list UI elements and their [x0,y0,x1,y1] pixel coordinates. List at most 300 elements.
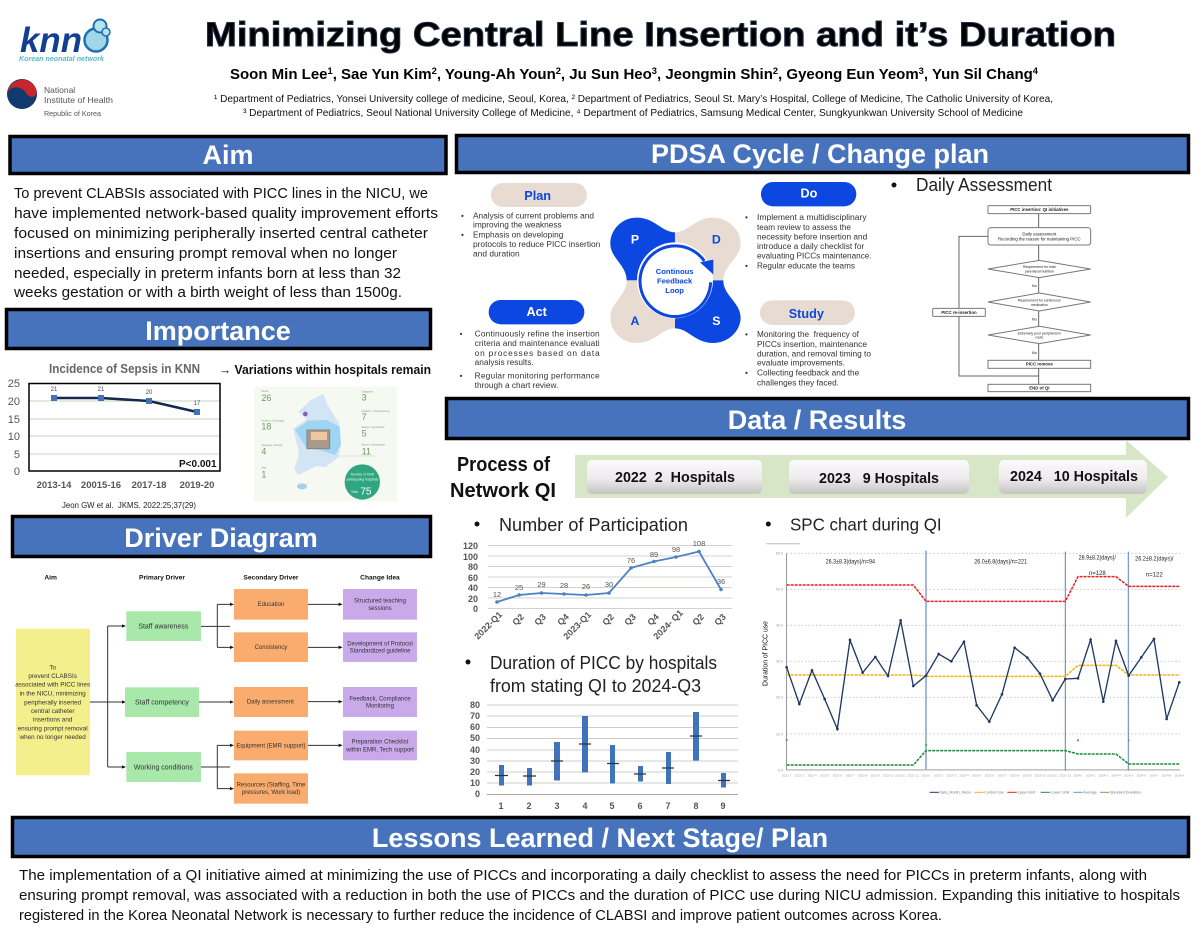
timeline arrow: 2023 9 Hospitals [819,470,939,487]
aim box: peripherally inserted [24,699,82,706]
chart legend [930,791,1141,795]
line chart: incidence of sepsis: Incidence of Sepsis in KNN [49,362,200,376]
logo: National Institute of Health: Institute of Health [44,95,113,105]
line chart: incidence of sepsis: 2019-20 [180,480,214,491]
SPC chart: 2024-2 [1086,774,1096,778]
authors: Soon Min Lee [230,67,324,83]
range chart: duration of PICC by hospitals: 70 [470,711,480,721]
flowchart: daily assessment: PICC remove [1026,362,1053,367]
flowchart: daily assessment: Extremely poor peripheral iv [1018,331,1061,335]
driver diagram chart: Daily assessment [247,699,294,705]
aim box [15,629,90,775]
logo: National Institute of Health [7,79,113,118]
SPC chart: n=128 [1089,571,1106,577]
authors: 1 [328,66,333,76]
line chart: number of participation: 0 [473,604,478,614]
range chart: duration of PICC by hospitals: 2 [526,801,532,811]
line chart: number of participation: 28 [560,581,568,590]
authors: 4 [1033,66,1038,76]
panel: driver diagram [12,516,430,804]
driver diagram chart: Education [258,602,284,608]
line chart: incidence of sepsis [8,362,220,510]
range chart: duration of PICC by hospitals [466,653,738,811]
authors: , Jeongmin Shin [657,67,773,83]
act: • [460,328,463,338]
SPC chart: 2023-1 [921,774,931,778]
do [745,182,872,270]
lessons text: ensuring prompt removal, was associated with a reduction in both the use of PICCs and the duration of PICC use during NICU admission. Expanding this initiative to hospitals [19,887,1180,904]
aim text: insertions and ensuring prompt removal when no longer [14,245,397,262]
aim box: ensuring prompt removal [18,726,88,733]
map: participating hospitals in Korea: Daejeon, Chungcheong [362,409,390,413]
SPC chart: 2023-5 [972,774,982,778]
SPC chart: 20.0 [776,696,783,700]
line chart: number of participation: Q2 [690,612,706,627]
aim box: prevent CLABSIs [28,673,77,680]
aim text: weeks gestation or with a birth weight of less than 1500g. [13,284,402,301]
line chart: number of participation: Q2 [510,612,526,627]
map: participating hospitals in Korea: 18 [261,422,271,432]
line chart: incidence of sepsis: 21 [98,387,105,393]
map: participating hospitals in Korea: Busan, Gyeongnam [362,442,386,446]
map: participating hospitals in Korea: 26 [261,393,271,403]
flowchart: daily assessment [933,206,1091,392]
line chart: number of participation: Q3 [712,612,728,627]
line chart: number of participation: 60 [468,573,478,583]
SPC chart: 2022-5 [820,774,830,778]
SPC chart: 2022-2 [795,774,804,778]
authors: , Ju Sun Heo [561,67,652,83]
line chart: incidence of sepsis: 15 [8,414,20,426]
range chart: duration of PICC by hospitals: 0 [475,789,480,799]
map: participating hospitals in Korea: participating hospitals [346,477,379,481]
flowchart: daily assessment: parenteral nutrition [1025,269,1054,273]
PDSA diagram [460,182,872,390]
label: process of network QI: Process of [457,454,550,476]
flowchart: daily assessment: medication [1031,303,1048,307]
chart legend: Average [1083,791,1097,795]
driver diagram chart: Working conditions [134,764,193,771]
study [745,300,871,387]
lessons text [19,867,1180,924]
line chart: number of participation: 108 [693,539,705,548]
aim text [13,185,438,301]
panel: data / results [446,398,1188,811]
act: • [460,370,463,380]
loop graphic: Continous [656,267,694,276]
line chart: number of participation: 2024- Q1 [651,608,685,641]
heading: aim [10,136,446,174]
plan: • [461,230,464,240]
SPC chart: 2024-5 [1124,774,1134,778]
label: process of network QI: Network QI [450,480,556,502]
flowchart: daily assessment: Daily assessment [1022,232,1057,237]
authors: 3 [919,66,924,76]
affiliations: ³ Department of Pediatrics, Seoul National University College of Medicine, ⁴ Department of Pediatrics, Samsung Medical Center, Sungkyunkwan University School of Medicine [243,108,1023,119]
column headings: Secondary Driver [243,574,299,581]
line chart: number of participation: 80 [468,562,478,572]
line chart: incidence of sepsis: 20015-16 [81,480,121,491]
chart legend: Data_Month_Mean [940,791,971,795]
act: criteria and maintenance evaluati [475,338,600,348]
authors: 2 [773,66,778,76]
heading: driver diagram: Driver Diagram [124,523,318,553]
act: Regular monitoring performance [475,370,600,380]
line chart: incidence of sepsis: 2013-14 [37,480,72,491]
logo: National Institute of Health: Republic of Korea [44,111,101,118]
study: • [745,368,748,378]
driver diagram chart: Monitoring [366,704,394,710]
do: • [745,212,748,222]
callout: variations within hospitals: → Variations within hospitals remain [219,363,431,377]
plan: improving the weakness [473,220,562,230]
driver diagram chart: Staff competency [135,699,189,706]
do: necessity before insertion and [757,232,868,242]
line chart: incidence of sepsis: 20 [8,396,20,408]
aim box: associated with PICC lines [15,682,90,689]
SPC chart: 2023-10 [1034,774,1046,778]
map: participating hospitals in Korea: 75 [360,486,372,497]
range chart: duration of PICC by hospitals: Duration of PICC by hospitals [490,653,717,673]
range chart: duration of PICC by hospitals: 5 [609,801,615,811]
plan: Emphasis on developing [473,230,564,240]
SPC chart: 2022-7 [782,774,792,778]
flowchart: daily assessment: No [1032,350,1038,355]
authors: 3 [652,66,657,76]
range chart: duration of PICC by hospitals: 1 [498,801,504,811]
line chart: incidence of sepsis: 10 [8,431,20,443]
affiliations [214,94,1053,119]
authors: 2 [432,66,437,76]
flowchart: daily assessment: No [1032,283,1038,288]
study: Collecting feedback and the [757,368,860,378]
aim text: To prevent CLABSIs associated with PICC lines in the NICU, we [14,185,428,202]
authors: , Gyeong Eun Yeom [778,67,919,83]
logo: Korean neonatal network [19,20,110,63]
label: process of network QI [450,454,556,502]
do: team review to assess the [757,222,851,232]
aim box: in the NICU, minimizing [20,691,86,698]
logo: National Institute of Health: National [44,85,75,95]
timeline arrow [575,440,1168,518]
SPC chart: SPC chart during QI [790,515,942,535]
aim box: central catheter [31,708,74,715]
column headings: Change Idea [360,574,400,581]
range chart: duration of PICC by hospitals: 10 [470,778,480,788]
SPC chart [760,515,1184,795]
SPC chart: 2023-8 [1010,774,1020,778]
heading: aim: Aim [202,140,254,170]
SPC chart: 2023-9 [1023,774,1032,778]
line chart: incidence of sepsis: 0 [14,466,20,478]
SPC chart: 26.3±8.3(days)/n=94 [826,559,876,565]
SPC chart: 2022-9 [871,774,880,778]
line chart: number of participation: 26 [582,582,590,591]
map: participating hospitals in Korea: 5 [362,429,367,439]
plan: and duration [473,248,520,258]
connectors [90,603,343,790]
driver diagram chart: Staff awareness [138,623,189,630]
act: analysis results. [475,357,534,367]
aim box: when no longer needed [19,734,86,741]
plan: Analysis of current problems and [473,210,594,220]
range chart: duration of PICC by hospitals: 60 [470,722,480,732]
loop graphic: Loop [665,286,684,295]
lessons text: The implementation of a QI initiative aimed at minimizing the use of PICCs and incorporating a daily checklist to assess the need for PICCs in preterm infants, along with [19,867,1147,884]
authors: , Yun Sil Chang [924,67,1033,83]
range chart: duration of PICC by hospitals: 4 [582,801,588,811]
study: Study [789,307,824,321]
line chart: incidence of sepsis: 2017-18 [132,480,166,491]
SPC chart: Duration of PICC use [760,621,769,686]
heading: importance [6,310,430,348]
do: evaluating PICCs maintenance. [757,251,872,261]
SPC chart: 2022-6 [833,774,842,778]
flowchart: daily assessment: PICC re-insertion [941,310,977,315]
authors: , Young-Ah Youn [437,67,556,83]
logo: Korean neonatal network: knn [20,21,82,60]
flowchart: daily assessment: END of QI [1029,386,1049,391]
column headings: Aim [44,574,57,581]
SPC chart: 2023-11 [1047,774,1058,778]
aim box: insertions and [33,717,73,724]
line chart: number of participation: 98 [672,545,680,554]
affiliations: ¹ Department of Pediatrics, Yonsei University college of medicine, Seoul, Korea, ² Department of Pediatrics, Seoul St. Mary’s Hospital, College of Medicine, The Catholic University of Korea, [214,94,1053,105]
chart legend: Upper limit [1017,791,1035,795]
heading: data / results [446,398,1188,438]
map: participating hospitals in Korea: Incheon, Gyeonggi [261,418,284,422]
SPC chart: 2024-7 [1149,774,1159,778]
line chart: incidence of sepsis: P<0.001 [179,459,217,470]
SPC chart: 2022-10 [883,774,894,778]
flowchart: daily assessment: route [1035,336,1043,340]
line chart: incidence of sepsis: 17 [194,401,201,407]
driver diagram chart: Preparation Checklist [352,740,409,746]
authors: , Sae Yun Kim [333,67,432,83]
timeline arrow: 2022 2 Hospitals [615,469,735,486]
heading: PDSA cycle [456,136,1188,172]
SPC chart: 2023-4 [959,774,969,778]
heading: driver diagram [12,516,430,556]
loop graphic: Feedback [657,276,693,285]
map: participating hospitals in Korea: 11 [362,446,371,456]
chart legend: Control Line [984,791,1004,795]
column headings: Primary Driver [139,574,185,581]
line chart: number of participation: 120 [463,541,478,551]
flowchart: daily assessment: No [1032,317,1038,322]
chart legend: Standard Deviation [1110,791,1141,795]
panel: aim [10,136,446,301]
range chart: duration of PICC by hospitals: 80 [470,700,480,710]
line chart: incidence of sepsis: Jeon GW et al. JKMS. 2022:25;37(29) [62,500,196,510]
panel: lessons learned [12,818,1188,924]
range chart: duration of PICC by hospitals: 50 [470,733,480,743]
aim box: To [49,664,56,671]
heading: lessons learned: Lessons Learned / Next Stage/ Plan [372,823,828,853]
line chart: number of participation: 2022-Q1 [472,610,504,641]
act: Continuously refine the insertion [475,328,600,338]
map: participating hospitals in Korea: Gangwon [362,389,374,393]
driver diagram chart: within EMR, Tech support [345,747,414,753]
flowchart: daily assessment: Requirement for continuous [1018,299,1061,303]
driver diagram chart: Development of Protocol [347,641,413,647]
change ideas [343,589,417,760]
plan: protocols to reduce PICC insertion [473,239,601,249]
SPC chart: 2024-8 [1162,774,1172,778]
map: participating hospitals in Korea: Jeju [261,466,267,470]
line chart: number of participation: 29 [537,580,546,589]
do: introduce a daily checklist for [757,241,865,251]
act: Act [526,305,548,319]
SPC chart: 2022-7 [845,774,855,778]
map: participating hospitals in Korea: 4 [261,446,266,456]
SPC chart: 2024-6 [1137,774,1146,778]
line chart: number of participation: 36 [717,577,725,586]
aim text: needed, especially in preterm infants born at less than 32 [14,265,401,282]
heading: data / results: Data / Results [728,405,906,435]
logo: Korean neonatal network: Korean neonatal network [19,56,105,63]
SPC chart: 2023-7 [997,774,1007,778]
line chart: incidence of sepsis: 5 [14,449,20,461]
column headings [44,574,400,581]
SPC chart: 30.0 [776,660,783,664]
plan: Plan [524,189,551,203]
driver diagram chart: pressures, Work load) [242,790,300,796]
line chart: number of participation: Number of Participation [499,515,688,535]
SPC chart: 2023-12 [1060,774,1071,778]
SPC chart: 60.0 [776,552,783,556]
map: participating hospitals in Korea: Gwangju, Jeonam [261,443,284,447]
line chart: incidence of sepsis: 21 [51,387,58,393]
authors: 2 [556,66,561,76]
study: challenges they faced. [757,377,839,387]
line chart: number of participation [463,515,732,641]
lessons text: registered in the Korea Neonatal Network is necessary to further reduce the incidence of CLABSI and improve patient outcomes across Korea. [19,907,942,924]
map: participating hospitals in Korea: 3 [362,393,367,403]
daily assessment heading: Daily Assessment [916,175,1052,195]
driver diagram chart: sessions [368,606,392,612]
driver diagram chart [15,574,417,804]
map: participating hospitals in Korea: Daegu, Gyeongbuk [362,425,385,429]
panel: importance [6,310,431,510]
SPC chart: 2023-6 [985,774,994,778]
line chart: number of participation: 40 [468,583,478,593]
driver diagram chart: Structured teaching [354,599,406,605]
title: Minimizing Central Line Insertion and it’s Duration [205,16,1116,54]
line chart: number of participation: 89 [650,550,658,559]
line chart: number of participation: Q2 [600,612,616,627]
SPC chart: n=122 [1146,572,1163,578]
SPC chart: 0.0 [778,768,783,772]
line chart: number of participation: Q3 [532,612,548,627]
range chart: duration of PICC by hospitals: 3 [554,801,560,811]
loop graphic [610,218,741,343]
timeline arrow: 2024 10 Hospitals [1010,468,1138,485]
do: Implement a multidisciplinary [757,212,867,222]
driver diagram chart: Feedback, Compliance [349,696,411,702]
flowchart: daily assessment: PICC insertion: QI initiatives [1010,207,1069,212]
range chart: duration of PICC by hospitals: 6 [637,801,643,811]
line chart: number of participation: Q4 [555,612,571,627]
loop graphic: P [631,232,639,246]
SPC chart: 26.0±6.8(days)/n=221 [974,559,1028,565]
study: Monitoring the frequency of [757,329,860,339]
SPC chart: 2023-3 [947,774,956,778]
plan: • [461,210,464,220]
map: participating hospitals in Korea: Number of KNN [351,473,375,477]
line chart: number of participation: 2023-Q1 [561,610,593,641]
study: duration, and removal timing to [757,349,871,359]
map: participating hospitals in Korea: Total [351,490,358,494]
line chart: incidence of sepsis: 25 [8,378,20,390]
do: Regular educate the teams [757,260,855,270]
map: participating hospitals in Korea: Seoul [261,389,269,393]
SPC chart: 2024-4 [1111,774,1121,778]
SPC chart: 2022-12 [908,774,919,778]
SPC chart: 2024-1 [1073,774,1083,778]
heading: lessons learned [12,818,1188,856]
act: on processes based on data [475,348,600,358]
act: through a chart review. [475,380,558,390]
SPC chart: 2022-8 [858,774,868,778]
panel: PDSA cycle [456,136,1188,392]
primary drivers [125,611,201,782]
heading: PDSA cycle: PDSA Cycle / Change plan [651,139,989,169]
chart legend: Lower Limit [1051,791,1069,795]
SPC chart: 40.0 [776,624,783,628]
flowchart: daily assessment: Recording the reason for maintaining PICC [998,237,1081,242]
line chart: incidence of sepsis: 20 [146,390,153,396]
range chart: duration of PICC by hospitals: 9 [720,801,726,811]
map: participating hospitals in Korea [254,387,397,502]
map: participating hospitals in Korea: 1 [261,469,266,479]
SPC chart: 2022-11 [895,774,906,778]
map: participating hospitals in Korea: 7 [362,412,367,422]
driver diagram chart: Standardized guideline [350,649,411,655]
range chart: duration of PICC by hospitals: 8 [693,801,699,811]
SPC chart: 50.0 [776,588,783,592]
line chart: number of participation: 30 [605,580,613,589]
study: PICCs insertion, maintenance [757,339,867,349]
line chart: number of participation: 25 [515,583,523,592]
study: • [745,329,748,339]
driver diagram chart: Resources (Staffing, Time [237,783,306,789]
loop graphic: S [712,314,720,328]
study: evaluate improvements. [757,358,845,368]
line chart: number of participation: 12 [493,590,501,599]
line chart: number of participation: 100 [463,552,478,562]
SPC chart: 2022-4 [807,774,817,778]
act [460,300,600,390]
line chart: number of participation: Q4 [645,612,661,627]
range chart: duration of PICC by hospitals: 40 [470,745,480,755]
range chart: duration of PICC by hospitals: 30 [470,756,480,766]
plan [461,183,601,258]
heading: importance: Importance [145,316,291,346]
aim text: focused on minimizing peripherally inserted central catheter [14,225,428,242]
SPC chart: 2024-3 [1099,774,1108,778]
flowchart: daily assessment: Requirement for total [1023,265,1056,269]
range chart: duration of PICC by hospitals: from stating QI to 2024-Q3 [490,676,701,696]
loop graphic: A [631,314,640,328]
SPC chart: 26.2±8.2(days)/ [1135,556,1174,562]
SPC chart: 28.9±8.2(days)/ [1079,556,1116,562]
loop graphic: D [712,232,721,246]
range chart: duration of PICC by hospitals: 7 [665,801,671,811]
do: Do [801,187,818,201]
aim text: have implemented network-based quality improvement efforts [14,205,438,222]
SPC chart: 2024-9 [1175,774,1184,778]
